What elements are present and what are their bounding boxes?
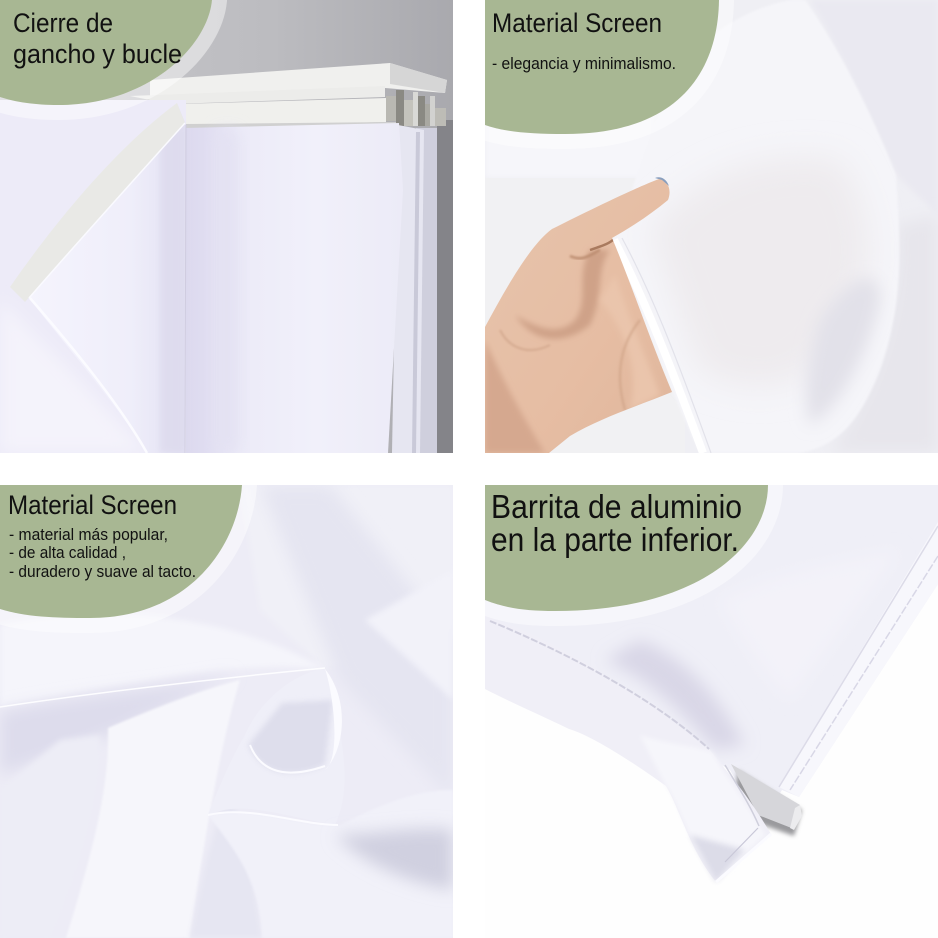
back fabric layers [416, 128, 437, 453]
rail clips [386, 90, 446, 126]
callout: Material Screen, elegancia [485, 0, 719, 134]
main curtain panel [185, 123, 403, 453]
callout text: - de alta calidad , [9, 543, 126, 562]
panel: fabric swirl [0, 485, 453, 938]
panel: aluminium bar [485, 485, 938, 882]
swirl core [226, 803, 232, 810]
callout text: Material Screen [8, 490, 177, 520]
light upper area [240, 485, 453, 669]
seam stitching [490, 621, 709, 749]
callout text [492, 8, 676, 73]
vertical fold [66, 680, 240, 938]
callout text: gancho y bucle [13, 39, 182, 69]
callout text: en la parte inferior. [491, 521, 739, 558]
panel: hook and loop closure [0, 0, 453, 453]
callout text [13, 8, 182, 69]
callout text [8, 490, 196, 581]
callout text: Barrita de aluminio [491, 488, 742, 525]
callout text: - elegancia y minimalismo. [492, 54, 676, 73]
callout text: - duradero y suave al tacto. [9, 562, 196, 581]
callout text: Material Screen [492, 8, 662, 38]
panel: fabric held in hand [485, 0, 938, 453]
callout: Barrita de aluminio [485, 485, 768, 611]
held drape of fabric [835, 80, 898, 436]
icon: hand [485, 177, 672, 453]
hem of fabric [614, 240, 703, 453]
callout text: - material más popular, [9, 525, 168, 544]
bottom folded hem [485, 616, 771, 882]
hook and loop tape [10, 103, 185, 302]
fabric body [492, 485, 938, 796]
right hem [904, 563, 914, 580]
curtain rail [130, 63, 447, 129]
folded-over flap [28, 103, 186, 453]
callout: Material Screen, features [0, 485, 242, 618]
callout text [491, 488, 742, 558]
callout text: Cierre de [13, 8, 113, 38]
fabric upper left [485, 100, 655, 178]
callout: Cierre de gancho y bucle [0, 0, 212, 105]
shading on right side [810, 0, 938, 215]
icon: aluminium bar [731, 764, 802, 836]
left fabric background [0, 100, 186, 453]
